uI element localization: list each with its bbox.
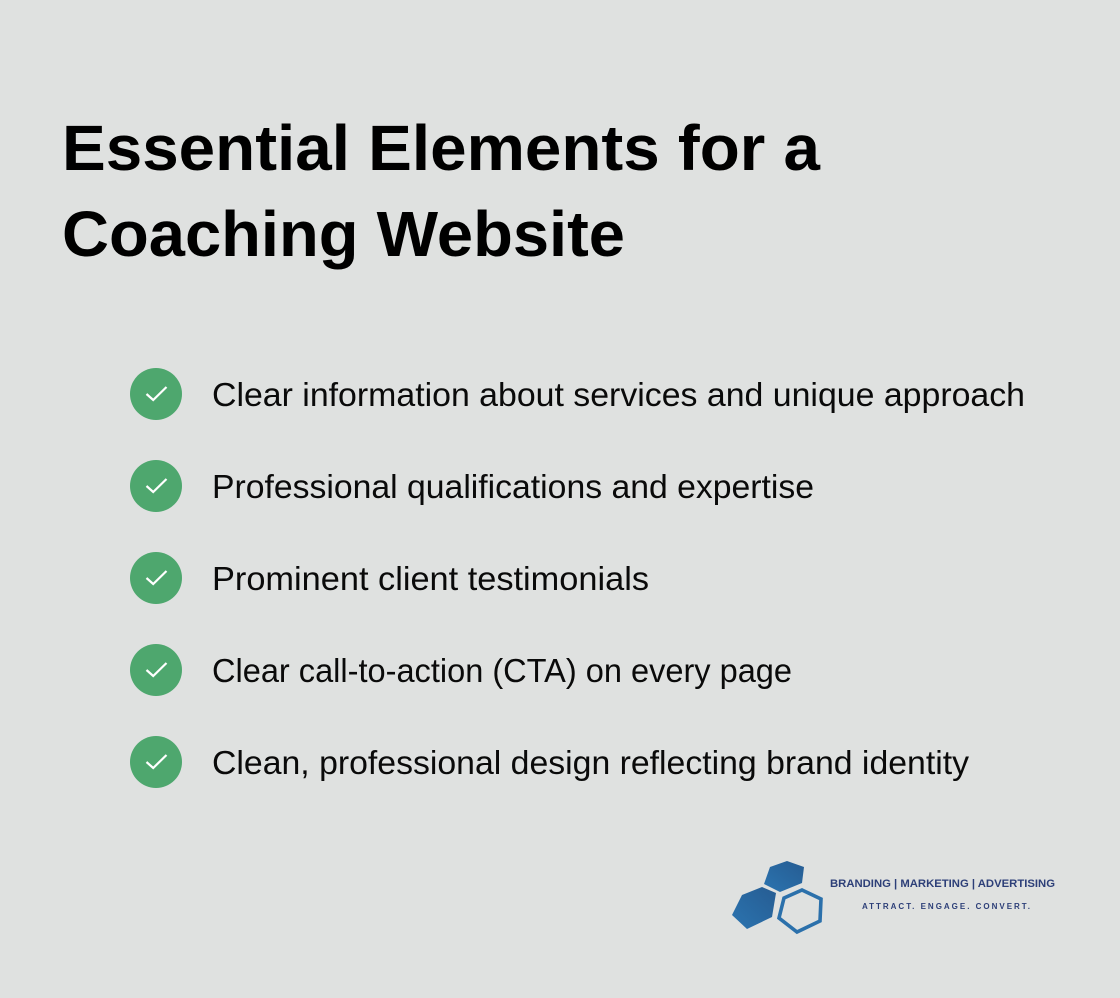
- item 2: qualifications: Professional qualifications and expertise: [212, 468, 814, 505]
- item 1: services and approach: Clear information about services and unique approach: [212, 376, 1025, 413]
- item 3: testimonials: Prominent client testimonials: [212, 560, 649, 597]
- item 5: design: [130, 736, 970, 788]
- item 2: qualifications: [130, 460, 814, 512]
- item 3: testimonials: [130, 552, 649, 604]
- logo: [732, 861, 1055, 932]
- title: [62, 112, 820, 270]
- logo wordmark: BRANDING | MARKETING | ADVERTISING: [830, 878, 1055, 890]
- item 4: call to action: Clear call-to-action (CTA) on every page: [212, 652, 792, 689]
- icon: three hexagons: [732, 861, 821, 932]
- logo tagline: ATTRACT. ENGAGE. CONVERT.: [862, 902, 1030, 911]
- item 4: call to action: [130, 644, 792, 696]
- checklist: [130, 368, 1025, 788]
- item 5: design: Clean, professional design reflecting brand identity: [212, 744, 970, 781]
- item 1: services and approach: [130, 368, 1025, 420]
- title: Coaching Website: [62, 198, 625, 270]
- title: Essential Elements for a: [62, 112, 820, 184]
